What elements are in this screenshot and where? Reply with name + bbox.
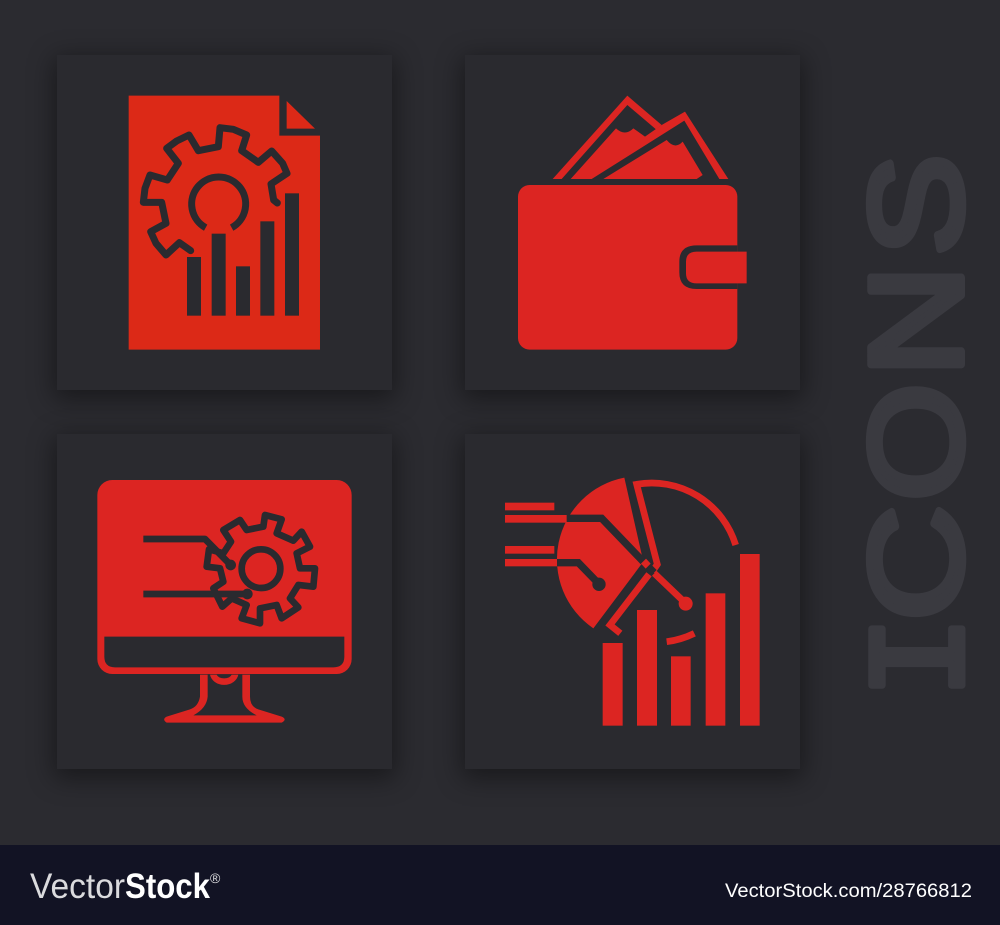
vertical word ICONS	[842, 154, 1000, 699]
logo: VectorStock: Stock	[125, 867, 210, 906]
logo: VectorStock	[30, 867, 221, 906]
footer bar	[0, 845, 1000, 925]
image id text: VectorStock.com/28766812	[725, 880, 972, 902]
vertical word ICONS: I	[849, 615, 1000, 699]
vertical word ICONS: S	[842, 154, 990, 256]
icon: monitor with gear	[97, 480, 352, 723]
panel: monitor tile	[57, 434, 392, 769]
logo: VectorStock: ®	[210, 870, 221, 886]
panel: chart tile	[465, 434, 800, 769]
icon: wallet with banknotes	[518, 96, 747, 350]
vertical word ICONS: N	[842, 265, 990, 377]
panel: wallet tile	[465, 55, 800, 390]
vertical word ICONS: O	[842, 383, 990, 501]
icon: pie chart with circuit lines and bars	[505, 478, 760, 726]
icon: document with gear and bars	[129, 96, 320, 350]
vertical word ICONS: C	[842, 505, 990, 621]
panel: document tile	[57, 55, 392, 390]
logo: VectorStock: Vector	[30, 867, 125, 906]
